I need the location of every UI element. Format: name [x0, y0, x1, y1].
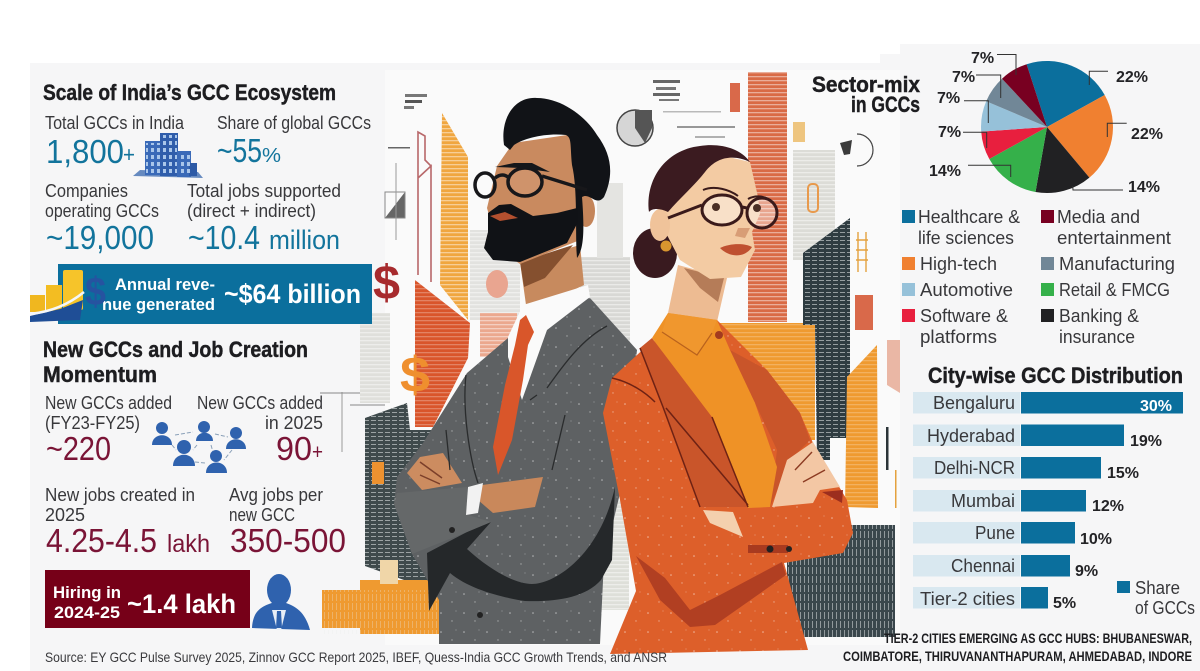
banner: hiring: 2024-25	[54, 603, 120, 622]
stat: total jobs supported: (direct + indirect)	[187, 201, 316, 221]
woman: earring	[660, 240, 672, 252]
man: forearm	[478, 477, 543, 513]
stat: new jobs created: New jobs created in	[45, 485, 195, 505]
man: neck	[520, 245, 584, 312]
woman: sleeve shadow	[636, 556, 786, 627]
legend: sectors	[902, 207, 1175, 347]
bar chart: city-wise distribution: 5%	[1053, 595, 1076, 612]
stat: average jobs per GCC: new GCC	[229, 505, 295, 525]
legend: sectors: Automotive	[920, 280, 1013, 300]
man: lower sleeve	[394, 487, 491, 554]
bar chart: city-wise distribution: 15%	[1107, 465, 1139, 482]
banner: hiring	[45, 570, 250, 628]
man: glasses	[475, 168, 587, 197]
banner: annual revenue	[58, 264, 372, 324]
woman: lapels	[640, 338, 748, 507]
stat: companies operating GCCs	[45, 181, 159, 256]
bar chart: city-wise distribution: Tier-2 cities	[920, 589, 1015, 609]
bar chart: city-wise distribution: Bengaluru	[933, 393, 1015, 413]
stat: new GCCs added FY23-FY25	[45, 393, 172, 467]
legend: sectors: Media and	[1057, 207, 1140, 227]
pie chart: sector mix: 7%	[952, 69, 975, 86]
central background illustration: skyline	[320, 72, 900, 637]
man: lips	[490, 212, 518, 221]
chart circle icon	[617, 110, 653, 146]
banner: annual revenue: nue generated	[102, 295, 215, 314]
bar chart: city-wise distribution: Chennai	[951, 556, 1015, 576]
stat: total GCCs: Total GCCs in India	[45, 113, 185, 133]
legend: sectors: entertainment	[1057, 228, 1171, 248]
bar chart: city-wise distribution: 9%	[1075, 563, 1098, 580]
pie chart: sector mix: 14%	[1128, 179, 1160, 196]
legend: sectors: Retail & FMCG	[1059, 280, 1170, 300]
stat: total jobs supported: Total jobs supported	[187, 181, 341, 201]
stat: new jobs created	[45, 485, 210, 559]
legend: sectors: life sciences	[918, 228, 1014, 248]
woman: hair	[648, 145, 750, 212]
legend: sectors: Manufacturing	[1059, 254, 1175, 274]
woman: glasses	[668, 195, 777, 228]
legend: sectors: Software &	[920, 306, 1008, 326]
bar chart: city-wise distribution: Hyderabad	[927, 426, 1015, 446]
stat: average jobs per GCC	[229, 485, 346, 559]
orange block, far right	[845, 345, 878, 508]
pie chart: sector mix: 22%	[1131, 126, 1163, 143]
bar chart: city-wise distribution: Delhi-NCR	[934, 458, 1015, 478]
icon: office buildings	[133, 133, 203, 178]
heading: sector mix: Sector-mix	[812, 72, 921, 97]
bar chart: city-wise distribution	[913, 392, 1183, 612]
stat: new GCCs added in 2025: in 2025	[265, 413, 323, 433]
bar chart: city-wise distribution: 30%	[1140, 398, 1172, 415]
man illustration	[394, 98, 637, 644]
stat: total GCCs	[45, 113, 185, 170]
banner: hiring: Hiring in	[53, 583, 121, 602]
bar chart: city-wise distribution: 10%	[1080, 531, 1112, 548]
bar chart: city-wise distribution: Mumbai	[951, 491, 1015, 511]
stat: new GCCs added in 2025: New GCCs added	[197, 393, 323, 413]
orange striped block, left	[322, 580, 442, 634]
stat: new jobs created: lakh	[167, 530, 210, 558]
banner: hiring: ~1.4 lakh	[127, 589, 236, 619]
woman: face	[657, 155, 760, 279]
woman: wrist	[703, 510, 743, 537]
stat: companies operating GCCs: ~19,000	[46, 219, 154, 256]
red striped block	[415, 280, 470, 427]
icon: people network	[152, 421, 246, 473]
stat: share of global GCCs	[217, 113, 371, 169]
woman illustration	[603, 145, 853, 654]
banner: annual revenue: Annual reve-	[115, 275, 215, 294]
man: tie	[493, 315, 534, 475]
man: jacket	[394, 298, 637, 644]
stat: average jobs per GCC: Avg jobs per	[229, 485, 323, 505]
legend: sectors: insurance	[1059, 327, 1135, 347]
dark striped building, left	[365, 403, 432, 590]
icon: business person	[252, 574, 310, 630]
source line: Source: EY GCC Pulse Survey 2025, Zinnov GCC Report 2025, IBEF, Quess-India GCC Growth Trends, and ANSR	[45, 649, 667, 665]
man: ear	[577, 195, 595, 227]
dollar sign, red: $	[373, 257, 400, 310]
dark block, bottom right	[787, 525, 895, 637]
man: hair	[503, 98, 610, 258]
woman: shirt	[652, 313, 777, 508]
stat: share of global GCCs: %	[262, 145, 281, 167]
woman: bun	[633, 228, 677, 278]
dark building, right	[803, 218, 850, 460]
stat: new jobs created: 2025	[45, 505, 85, 525]
stat: total GCCs: +	[123, 142, 135, 167]
stat: new jobs created: 4.25-4.5	[46, 522, 157, 559]
legend: share of GCCs	[1117, 578, 1195, 618]
stat: total jobs supported: million	[269, 225, 340, 255]
stat: new GCCs added in 2025: 90	[276, 430, 312, 467]
man: face	[486, 134, 582, 264]
stat: average jobs per GCC: 350-500	[230, 522, 346, 559]
stat: companies operating GCCs: Companies	[45, 181, 128, 201]
bar chart: city-wise distribution: Pune	[975, 523, 1015, 543]
stat: new GCCs added in 2025: +	[312, 441, 323, 464]
heading: new GCCs and job creation: New GCCs and Job Creation	[43, 337, 308, 362]
pie chart: sector mix: 7%	[937, 90, 960, 107]
pie chart: sector mix: 7%	[971, 50, 994, 67]
stat: total jobs supported	[187, 181, 341, 256]
woman: lips	[720, 244, 752, 255]
footnote: tier-2 hubs	[843, 630, 1192, 664]
heading: new GCCs and job creation: Momentum	[43, 362, 157, 387]
heading: sector mix: in GCCs	[851, 92, 920, 117]
yellow striped tower	[440, 113, 468, 320]
stat: share of global GCCs: ~55	[217, 132, 262, 169]
legend: share of GCCs: Share	[1135, 578, 1180, 598]
woman: jacket	[603, 320, 853, 654]
stat: new GCCs added FY23-FY25: New GCCs added	[45, 393, 172, 413]
woman: ear	[650, 209, 670, 241]
heading: new GCCs and job creation	[43, 337, 308, 387]
man: shirt and collar	[508, 285, 590, 400]
stat: total jobs supported: ~10.4	[188, 219, 260, 256]
man: beard	[484, 204, 578, 262]
woman: neck	[668, 265, 727, 322]
stat: new GCCs added FY23-FY25: (FY23-FY25)	[45, 413, 140, 433]
woman: hand	[772, 442, 840, 507]
heading: scale of India's GCC ecosystem: Scale of India’s GCC Ecosystem	[43, 80, 336, 105]
stat: new GCCs added FY23-FY25: ~220	[46, 430, 111, 467]
pie chart: sector mix	[929, 50, 1163, 196]
bar chart: city-wise distribution: 12%	[1092, 498, 1124, 515]
pie chart: sector mix: 22%	[1116, 69, 1148, 86]
legend: sectors: Banking &	[1059, 306, 1139, 326]
dollar sign, orange: $	[400, 347, 430, 403]
stat: new GCCs added in 2025	[197, 393, 323, 467]
orange block, centre right	[720, 323, 815, 440]
icon: rising bar chart with dollar	[30, 270, 106, 322]
banner: annual revenue: ~$64 billion	[224, 279, 361, 309]
legend: sectors: Healthcare &	[918, 207, 1020, 227]
legend: sectors: platforms	[920, 327, 997, 347]
legend: sectors: High-tech	[920, 254, 997, 274]
icon: rising bar chart with dollar: $	[85, 270, 106, 314]
stat: share of global GCCs: Share of global GCCs	[217, 113, 371, 133]
stat: total GCCs: 1,800	[46, 133, 124, 170]
man: jacket shadow	[427, 487, 615, 611]
right side: red striped tower	[748, 72, 787, 322]
stat: companies operating GCCs: operating GCCs	[45, 201, 159, 221]
pie chart: sector mix: 14%	[929, 163, 961, 180]
heading: sector mix	[812, 72, 921, 117]
man: hand	[407, 453, 462, 490]
bar chart: city-wise distribution: 19%	[1130, 433, 1162, 450]
pie chart: sector mix: 7%	[938, 124, 961, 141]
